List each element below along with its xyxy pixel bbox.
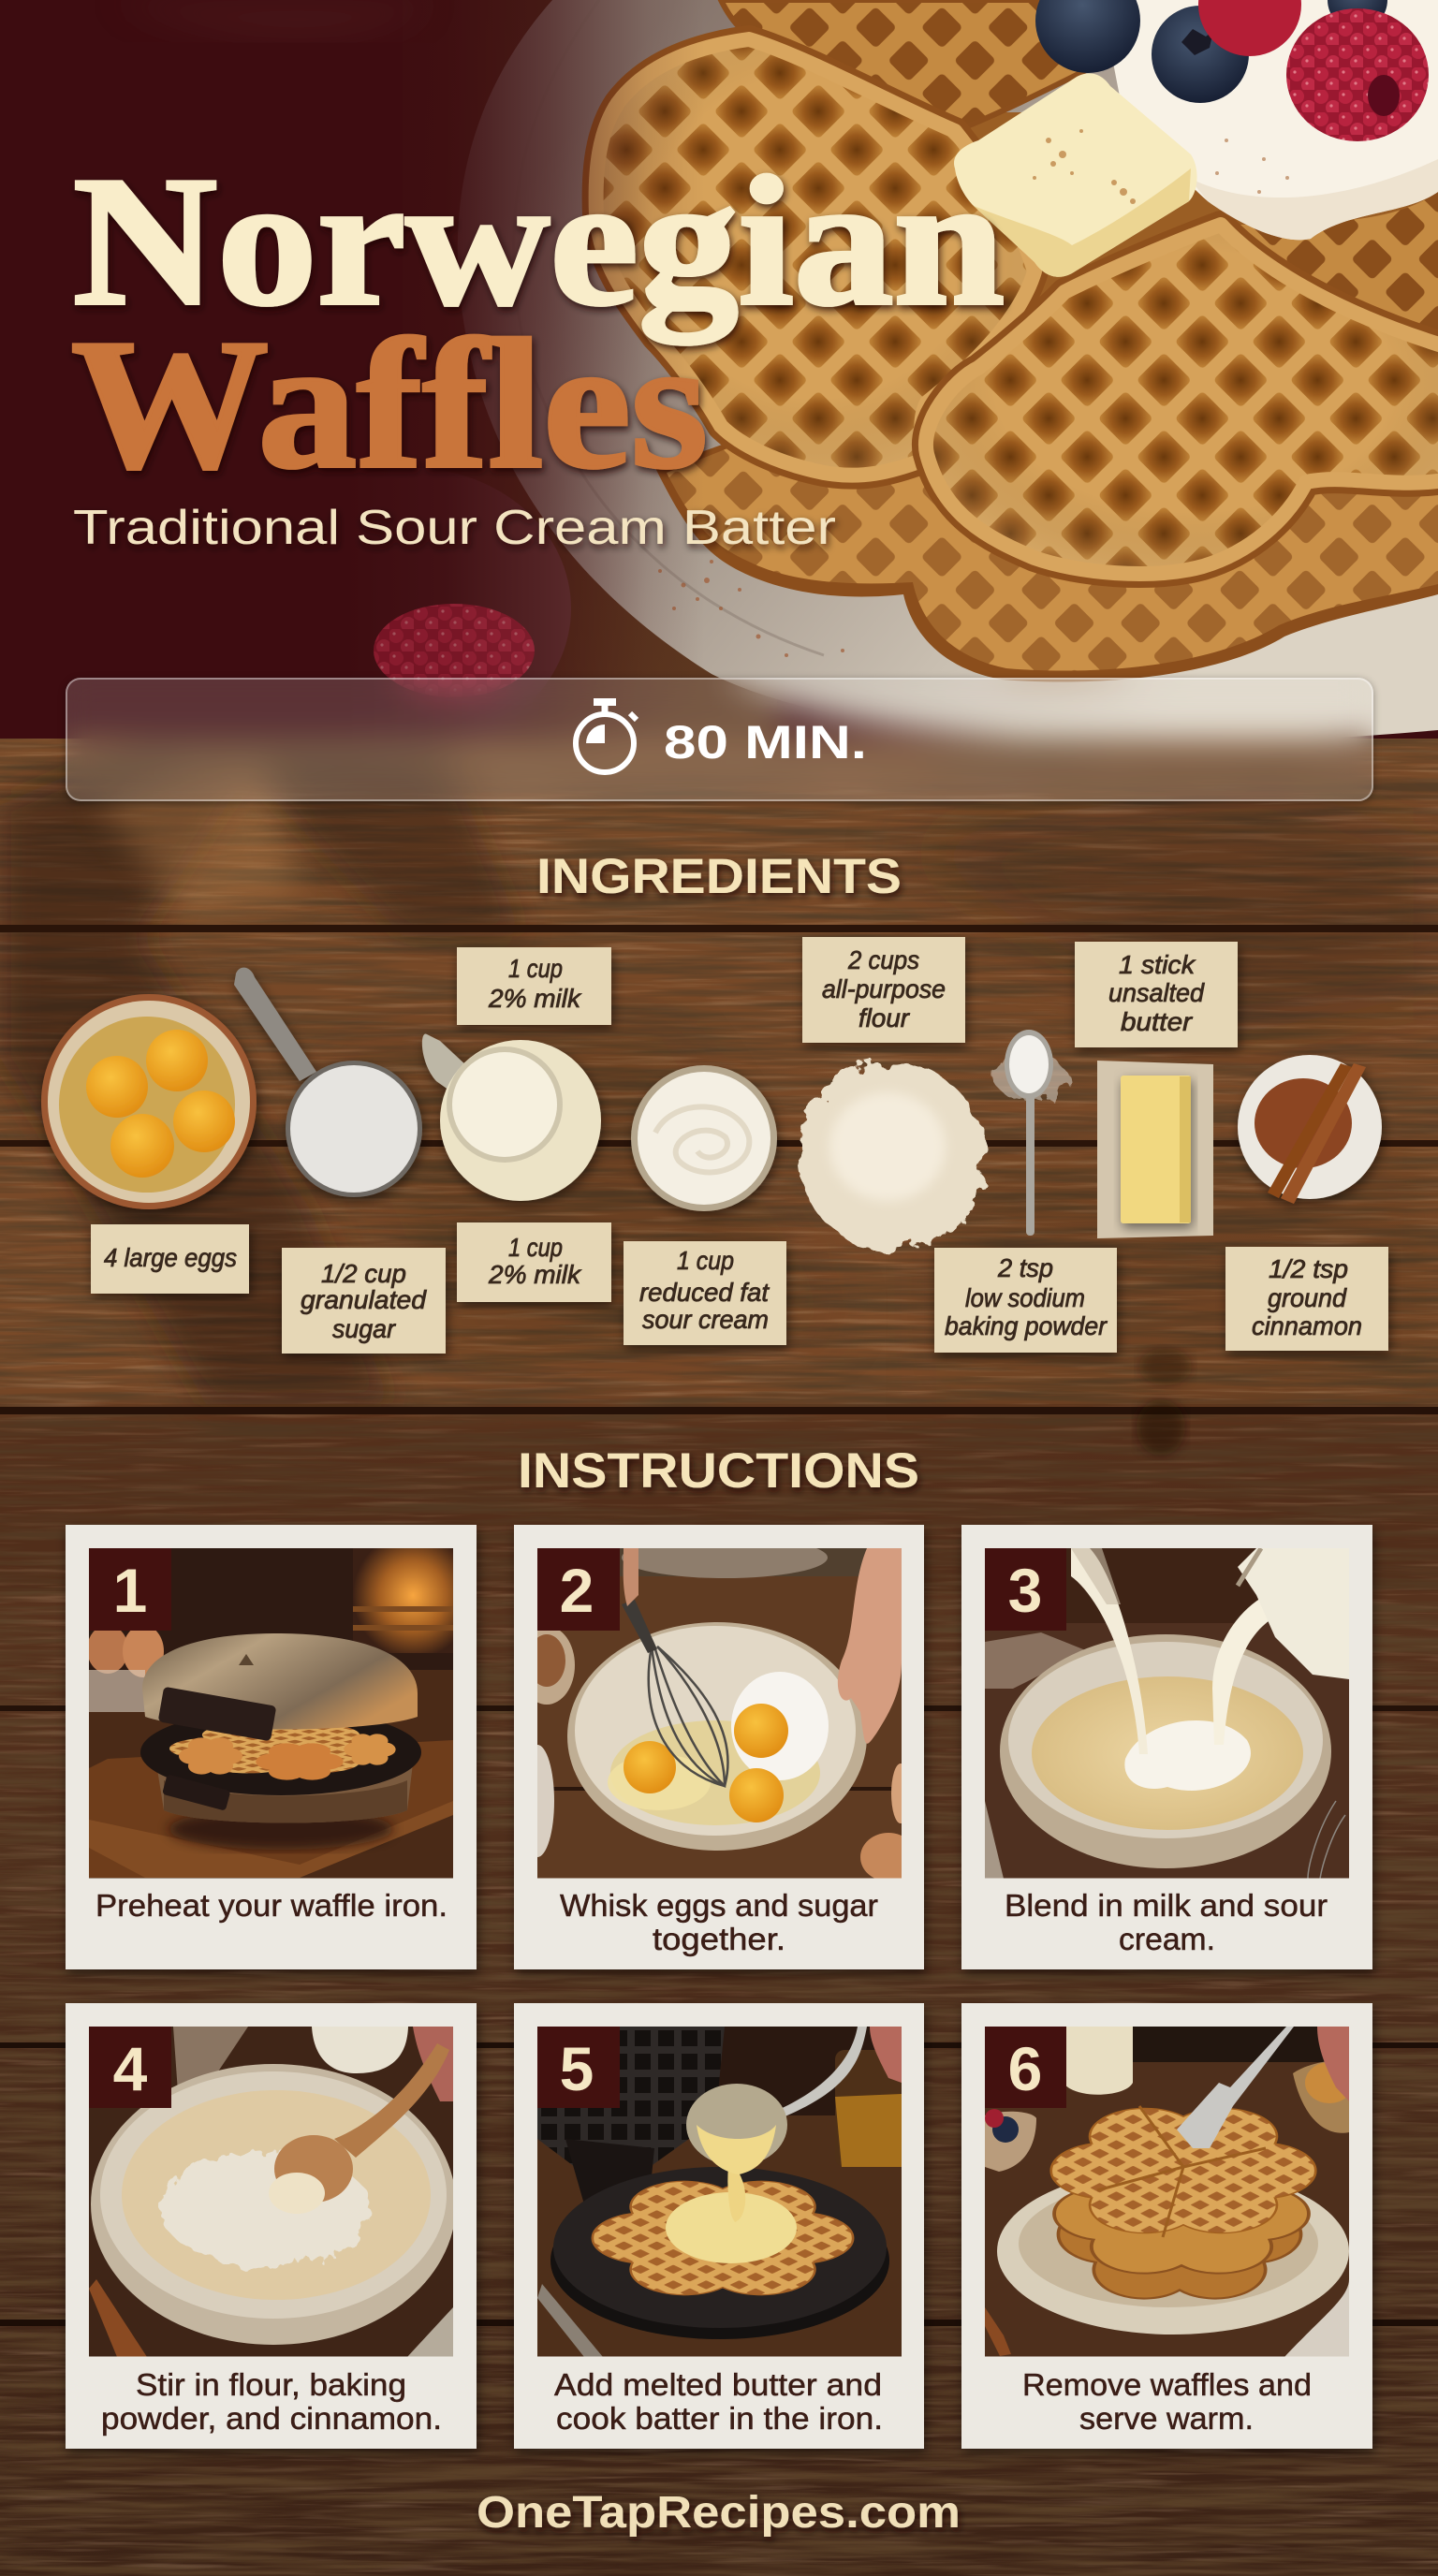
step 4 caption [101,2367,442,2436]
step 3 caption [1005,1888,1328,1956]
step 2 caption [560,1888,878,1956]
waffle: back top [717,0,1087,127]
ingredient: flour pile [798,1062,985,1250]
blueberries and raspberries [1035,0,1429,141]
hero photo: waffles on a plate [0,0,1438,749]
waffle: lower stack [655,402,1438,682]
butter pat [954,73,1197,277]
ingredient note: baking powder: low sodium [965,1283,1085,1312]
ingredient note: 1 cup 2% milk lower: 2% milk [488,1260,582,1289]
dim raspberry on the table [374,604,535,697]
ingredient note: cinnamon: 1/2 tsp [1269,1254,1348,1283]
step 4 caption: powder, and cinnamon. [101,2401,442,2436]
ingredient: eggs in terracotta bowl [41,994,257,1209]
step 4 card [66,2003,477,2449]
step 5 badge: 5 [560,2034,594,2103]
ingredient note: 1 cup 2% milk top: 2% milk [488,984,582,1013]
ingredient: stick of butter [1097,1061,1213,1238]
ingredient note: baking powder: 2 tsp [997,1253,1053,1282]
ingredient note: eggs: 4 large eggs [104,1243,237,1272]
time bar: 80 min [66,678,1373,801]
ingredient note: butter [1075,942,1238,1047]
ingredient note: 1 cup 2% milk top [457,947,611,1025]
ingredient note: sugar [282,1248,446,1354]
waffle: front heart [926,225,1438,574]
step 6 badge [985,2027,1066,2108]
waffle: main left heart [596,39,1034,476]
sour cream dollop [1101,0,1438,240]
step 2 caption: Whisk eggs and sugar [560,1888,878,1923]
waffle: under-fill behind toppings [970,112,1431,298]
ingredient note: 1 cup 2% milk lower: 1 cup [508,1233,563,1262]
footer website: OneTapRecipes.com [477,2488,961,2538]
title [71,139,1005,506]
title: Norwegian [73,139,1005,344]
title: Waffles [71,301,708,506]
ingredient: milk jug [422,1034,601,1201]
subtitle: Traditional Sour Cream Batter [73,501,836,555]
ingredient note: sugar: sugar [332,1314,397,1343]
ingredient note: cinnamon: cinnamon [1252,1311,1362,1340]
ingredient note: butter: unsalted [1108,978,1205,1007]
ingredient note: eggs [91,1224,249,1294]
ingredient note: flour: flour [858,1003,911,1032]
step 6 caption: Remove waffles and [1022,2367,1312,2402]
ingredient note: sour cream [624,1241,786,1345]
step 2 card [514,1525,924,1969]
step 5 caption [554,2367,883,2436]
instructions heading: INSTRUCTIONS [518,1443,919,1499]
ingredient note: baking powder [934,1248,1117,1353]
step 2 badge: 2 [560,1556,594,1625]
waffle: right edge [1240,192,1438,329]
step 5 card [514,2003,924,2449]
ingredient note: 1 cup 2% milk lower [457,1222,611,1302]
step 5 caption: Add melted butter and [554,2367,882,2402]
step 4 badge: 4 [113,2034,148,2103]
step 6 caption: serve warm. [1079,2401,1254,2436]
step 1 badge: 1 [113,1556,147,1625]
step 6 badge: 6 [1008,2034,1042,2103]
step 1 badge [89,1548,171,1631]
wood table background [0,739,1438,2576]
step 6 photo: serving waffles [985,2027,1354,2357]
step 4 photo: stirring flour [89,2027,456,2357]
step 1 card [66,1525,477,1969]
step 6 card [961,2003,1372,2449]
step 6 caption [1022,2367,1312,2436]
ingredient note: cinnamon [1225,1247,1388,1351]
ingredient note: cinnamon: ground [1268,1283,1347,1312]
icon: stopwatch [576,702,637,772]
ingredient note: flour [802,937,965,1043]
ingredient: cinnamon bowl [1238,1055,1382,1204]
ingredient note: sour cream: 1 cup [677,1246,734,1275]
step 2 photo: whisking eggs [519,1537,917,1881]
time label: 80 MIN. [664,716,867,768]
step 1 photo: waffle iron [87,1548,453,1879]
step 5 caption: cook batter in the iron. [556,2401,883,2436]
ingredients heading: INGREDIENTS [536,849,902,904]
step 4 badge [89,2027,171,2108]
step 3 badge [985,1548,1066,1631]
ingredient note: butter: 1 stick [1119,950,1196,979]
ingredient note: baking powder: baking powder [945,1311,1108,1340]
step 5 photo: cooking batter [537,2027,902,2357]
ingredient note: 1 cup 2% milk top: 1 cup [508,954,563,983]
ingredient: sugar in measuring cup [234,968,422,1197]
ingredient note: flour: 2 cups [847,945,919,974]
step 2 badge [537,1548,620,1631]
ingredient note: sugar: granulated [301,1285,427,1314]
step 3 caption: Blend in milk and sour [1005,1888,1328,1923]
ingredient note: sugar: 1/2 cup [321,1259,406,1288]
ingredient: baking powder spoon [994,1030,1065,1236]
ingredient note: butter: butter [1121,1007,1194,1036]
step 4 caption: Stir in flour, baking [136,2367,406,2402]
step 3 badge: 3 [1008,1556,1042,1625]
step 3 photo: blending milk [985,1548,1349,1879]
step 3 card [961,1525,1372,1969]
step 5 badge [537,2027,620,2108]
ingredient note: flour: all-purpose [822,974,946,1003]
step 3 caption: cream. [1119,1922,1215,1956]
step 2 caption: together. [653,1922,785,1956]
step 1 caption: Preheat your waffle iron. [95,1888,448,1923]
ingredient: sour cream bowl [631,1065,777,1211]
ingredient note: sour cream: sour cream [642,1305,769,1334]
ingredient note: sour cream: reduced fat [639,1278,770,1307]
cinnamon dust [658,560,844,657]
